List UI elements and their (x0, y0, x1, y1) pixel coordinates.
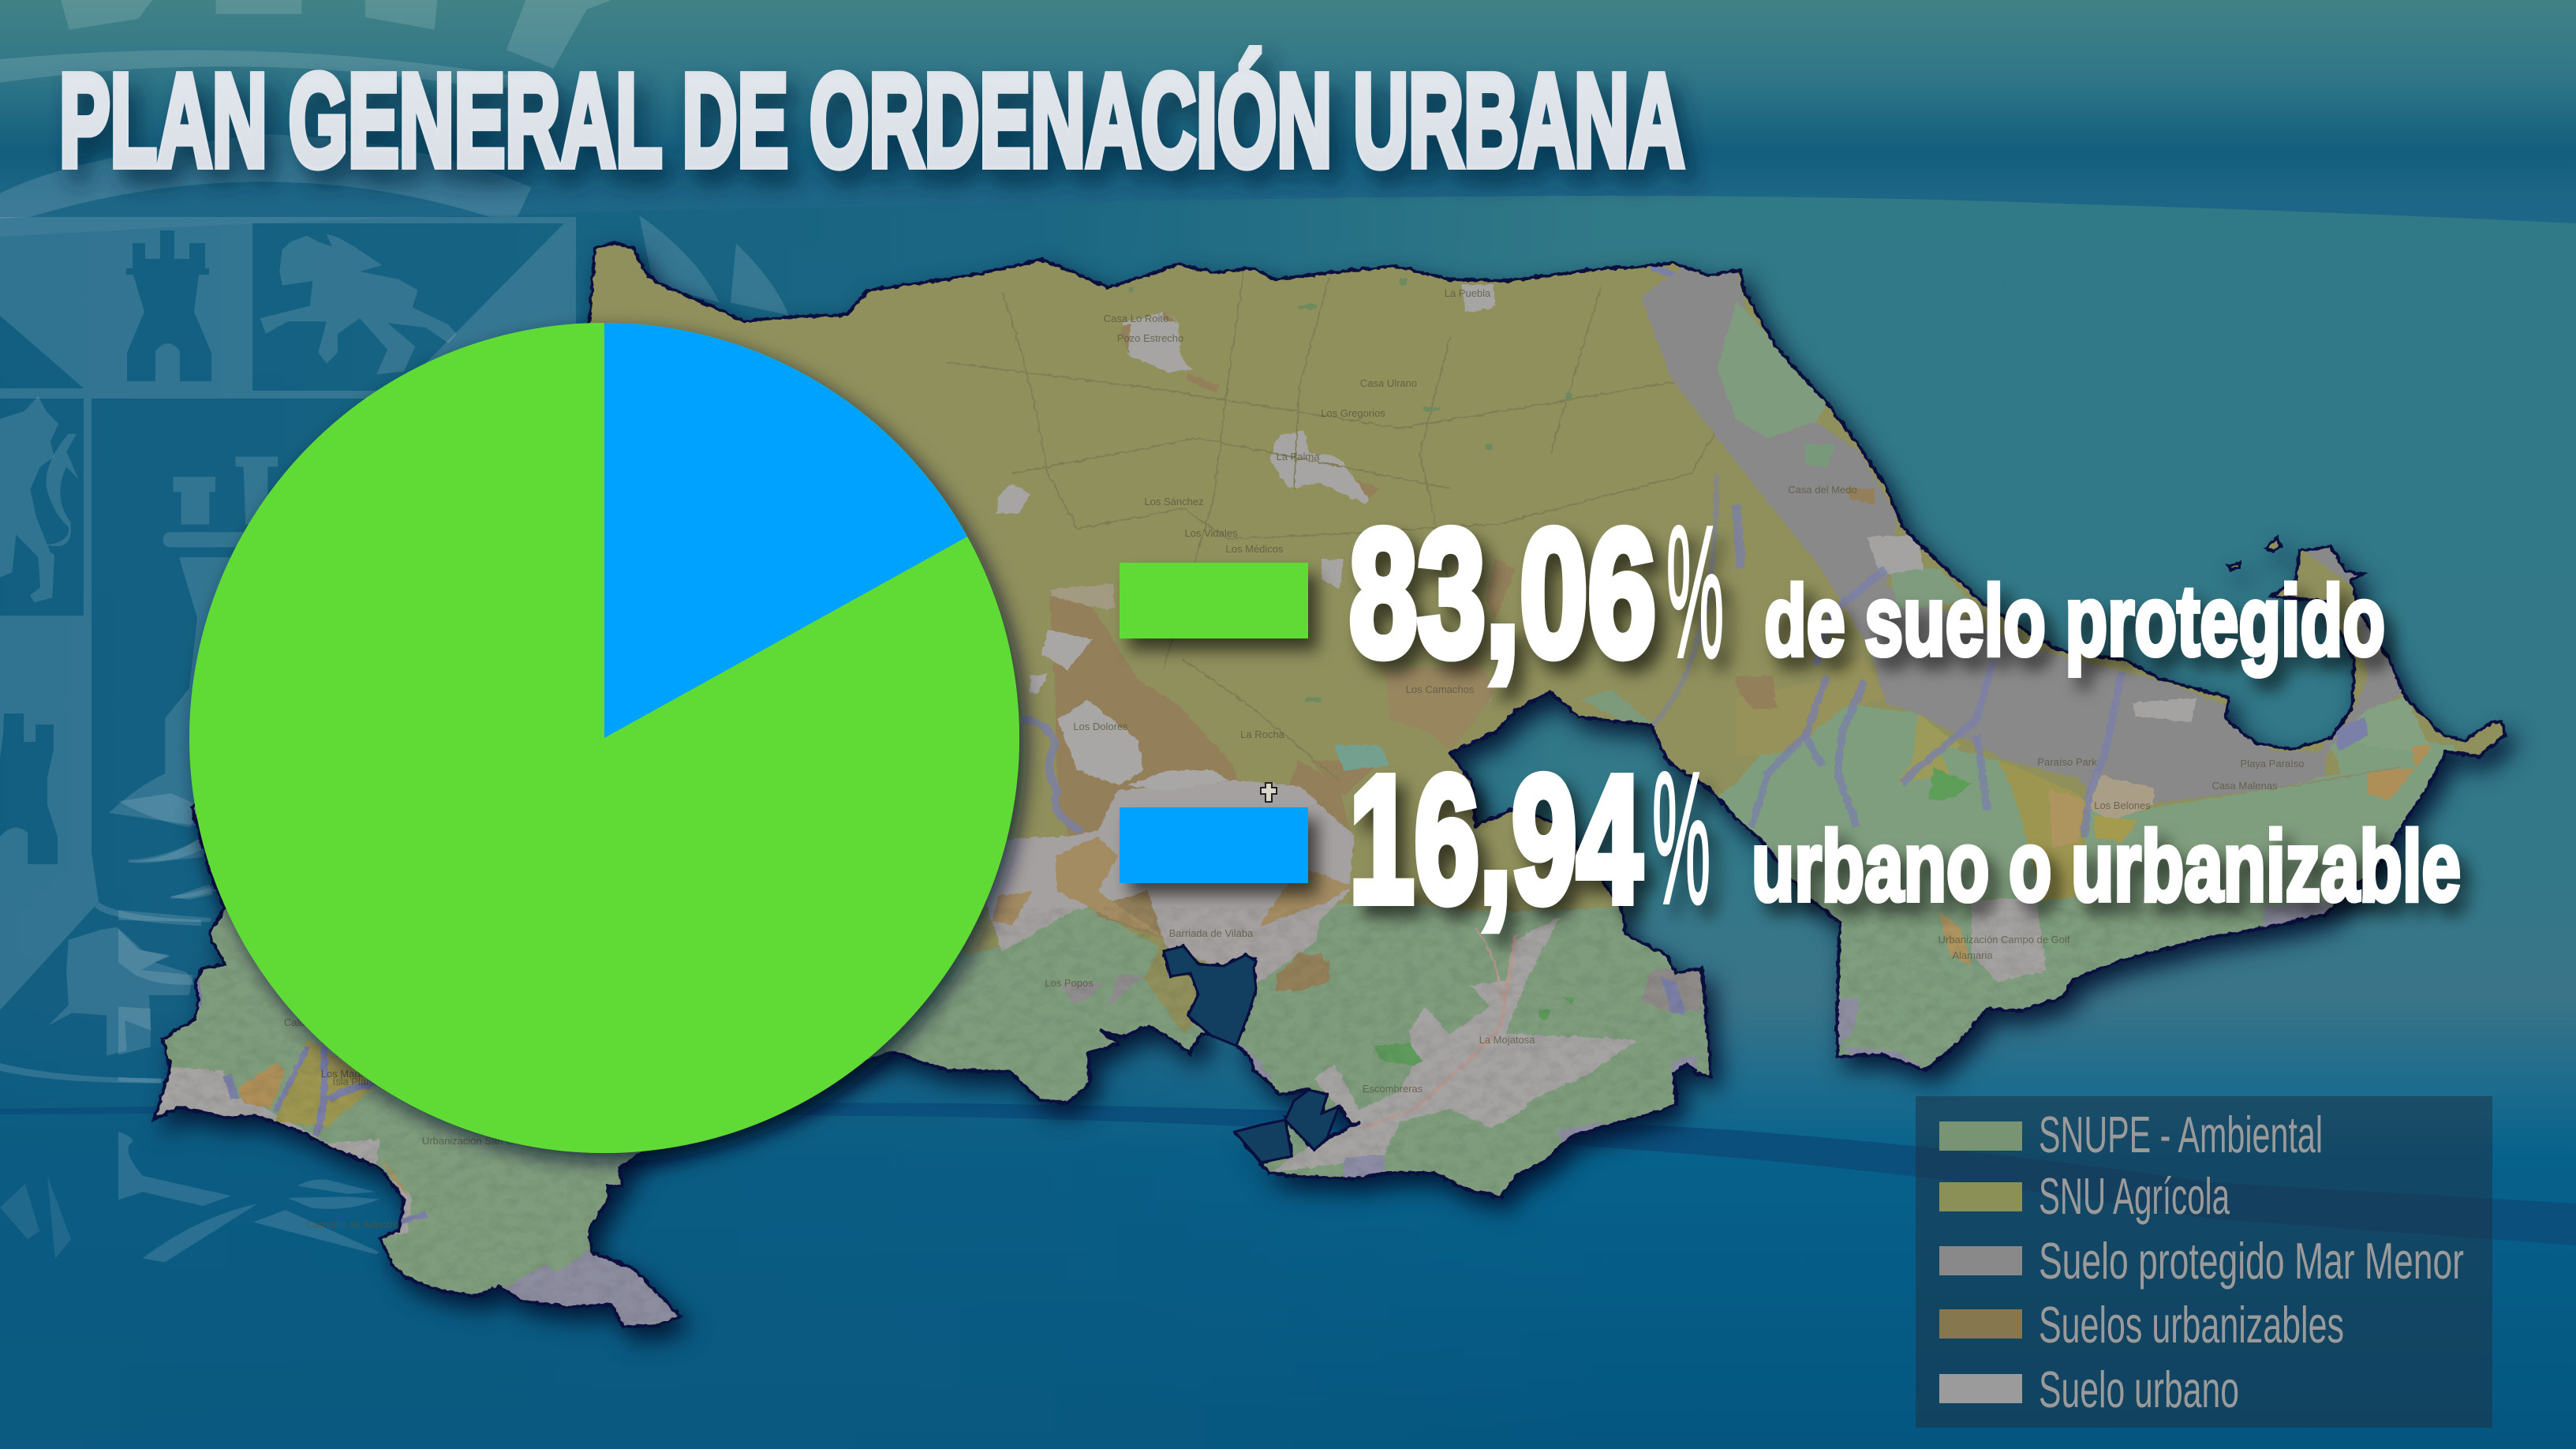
map place names: Escombreras (1363, 1083, 1423, 1095)
map place names: La Rocha (1240, 728, 1285, 740)
panel: map legend (1916, 1096, 2492, 1428)
legend item: SNU Agrícola: SNU Agrícola (2039, 1167, 2230, 1225)
map place names: Caldero de los Serranos (284, 1017, 395, 1028)
map place names: Casa Ulrano (1360, 377, 1417, 389)
map place names: Los Sánchez (1144, 496, 1204, 507)
legend item: Suelo protegido Mar Menor (1939, 1232, 2464, 1290)
legend row: protected land (1120, 488, 2385, 697)
map place names: Barriada de Vilaba (1169, 927, 1254, 939)
zone: coastal southwest (155, 979, 682, 1329)
map place names: Urbanización Campo de Golf (1939, 934, 2070, 945)
pie chart (189, 323, 1019, 1153)
map place names: Campillo de Adentro (306, 1219, 399, 1230)
map place names: Los Vidales (1185, 527, 1238, 539)
map place names: La Palma (1277, 451, 1320, 462)
value: 83,06: 83,06 (1349, 493, 1656, 694)
map place names: Los Camachos (1406, 683, 1475, 695)
legend item: SNU Agrícola (1939, 1167, 2230, 1225)
map place names: Los Belones (2094, 799, 2151, 811)
map place names (284, 287, 2304, 1230)
map place names: La Puebla (1445, 287, 1491, 299)
map place names: Los Gregorios (1321, 407, 1385, 419)
harbour water (1164, 946, 1339, 1163)
map place names: Paraíso Park (2037, 756, 2097, 768)
map place names: Alamaria (1952, 949, 1993, 961)
legend item: Suelo urbano (1939, 1361, 2239, 1418)
map place names: Casa Malenas (2211, 780, 2278, 792)
map place names: Pozo Estrecho (1117, 332, 1183, 344)
map place names: La Mojatosa (1479, 1034, 1535, 1046)
legend item: SNUPE - Ambiental: SNUPE - Ambiental (2039, 1106, 2323, 1163)
pie slice: 83,06% (189, 323, 1019, 1153)
zone: Suelo protegido Mar Menor (1628, 258, 2486, 1077)
terrain hillshade (162, 908, 2264, 1326)
watermark: municipal coat of arms (0, 0, 789, 1262)
map place names: Los Dolores (1073, 721, 1128, 732)
legend item: Suelo urbano: Suelo urbano (2039, 1361, 2239, 1418)
legend row: urban land: % (1652, 734, 1710, 943)
pie slice: 16,94% (604, 323, 967, 738)
legend item: Suelos urbanizables (1939, 1296, 2344, 1354)
value: 16,94: 16,94 (1349, 739, 1642, 940)
zone: SNUPE ambiental west and south (164, 807, 1678, 1324)
icon: cross cursor (1261, 783, 1277, 802)
map place names: Casa Lo Roito (1104, 313, 1168, 324)
swatch: blue (1120, 807, 1308, 883)
map of the municipality with land-use zones (79, 221, 2533, 1342)
legend item: SNUPE - Ambiental (1939, 1106, 2323, 1163)
map place names: Los Médicos (1226, 543, 1284, 555)
map outline (155, 243, 2505, 1327)
map place names: Urbanización San Ginés (422, 1135, 533, 1147)
map place names: Playa Paraíso (2241, 758, 2304, 769)
zone: Cartagena east valley (1060, 916, 1702, 1179)
map place names: Isla Plana (332, 1076, 378, 1088)
legend item: Suelos urbanizables: Suelos urbanizables (2039, 1296, 2344, 1354)
map place names: Los Popos (1045, 977, 1094, 989)
zone: Cartagena urban and urbanizable land (947, 264, 1736, 992)
zone: SNU agrícola (586, 245, 2522, 1051)
map place names: Casa del Medo (1788, 484, 1857, 496)
swatch: green (1120, 563, 1308, 638)
legend row: urban land (1120, 734, 2461, 943)
map place names: Los Madrilles (321, 1068, 382, 1080)
legend row: protected land: % (1666, 488, 1724, 697)
